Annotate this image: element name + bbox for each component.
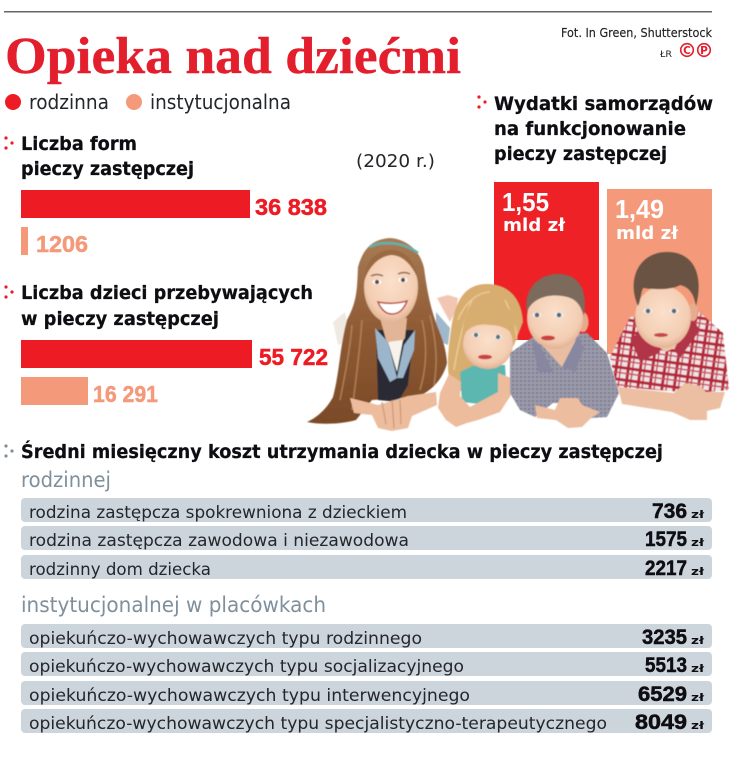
bar: rodzinna 55 722 [21,340,252,368]
photo: four children lying down [307,238,729,431]
heading: pieczy zastępczej [494,143,667,165]
value: 1,49 mld zł [615,194,679,244]
bar: instytucjonalna 1206 [21,227,28,255]
icon: copyright mark: C [683,45,691,57]
row: spokrewniona: 736 [652,500,687,523]
child: girl with long hair [307,238,458,431]
row: typu socjalizacyjnego: opiekuńczo-wychowawczych typu socjalizacyjnego [29,657,464,677]
row: typu socjalizacyjnego [21,652,712,677]
heading: na funkcjonowanie [494,118,686,140]
value: 1,49 mld zł: 1,49 [615,194,664,224]
child: blonde toddler [438,284,523,427]
row: rodzinny dom dziecka [21,555,712,580]
icon: grey dots [4,444,14,458]
panel: średni miesięczny koszt [4,439,712,734]
row: typu socjalizacyjnego: zł [691,662,705,675]
bar: rodzinna 36 838 [21,190,250,218]
heading: w pieczy zastępczej [21,308,219,330]
row: zawodowa: rodzina zastępcza zawodowa i niezawodowa [29,531,409,551]
heading: pieczy zastępczej [21,158,194,180]
heading: Średni miesięczny koszt utrzymania dziecka w pieczy zastępczej [21,439,663,463]
row: rodzinny dom dziecka: zł [691,565,705,578]
legend dot: instytucjonalna [126,94,142,110]
row: typu specjalistyczno-terapeutycznego: 8049 [635,711,687,734]
heading: Liczba form [21,133,137,155]
panel: wydatki samorządów [477,93,713,354]
row: spokrewniona [21,498,712,523]
row: typu specjalistyczno-terapeutycznego: zł [691,719,705,732]
value: 1206: 1206 [36,231,88,257]
author initials: ŁR [659,50,672,60]
row: zawodowa: zł [691,536,705,549]
value: 55 722: 55 722 [259,344,328,370]
heading: Liczba dzieci przebywających [21,282,313,304]
row: typu specjalistyczno-terapeutycznego: opiekuńczo-wychowawczych typu specjalistyczno-terapeutycznego [29,714,607,734]
row: typu specjalistyczno-terapeutycznego [21,709,712,734]
title: Opieka nad dziećmi [5,28,461,85]
legend [5,90,291,114]
year note: (2020 r.) [356,151,435,172]
photo credit: Fot. In Green, Shutterstock [561,25,713,40]
row: zawodowa: 1575 [645,528,687,551]
row: rodzinny dom dziecka: rodzinny dom dziecka [29,560,211,580]
value: 1,55 mld zł: 1,55 [502,187,549,217]
icon: press mark: P [700,45,708,57]
row: typu rodzinnego: zł [691,634,705,647]
heading: Wydatki samorządów [494,93,713,115]
row: typu interwencyjnego: opiekuńczo-wychowawczych typu interwencyjnego [29,686,470,706]
row: typu rodzinnego: 3235 [642,626,687,649]
panel: liczba dzieci [4,282,328,407]
icon: copyright mark [681,44,693,57]
icon: red dots [477,95,487,109]
bar: rodzinna 1,55 [494,182,599,340]
row: typu interwencyjnego: 6529 [638,683,687,706]
icon: red dots [4,285,14,299]
subheading: rodzinnej: rodzinnej [21,468,111,492]
row: typu rodzinnego: opiekuńczo-wychowawczych typu rodzinnego [29,629,422,649]
row: rodzinny dom dziecka: 2217 [645,557,687,580]
value: 36 838: 36 838 [255,194,327,220]
bar: instytucjonalna 16 291 [21,377,88,405]
row: zawodowa [21,526,712,551]
row: spokrewniona: zł [691,508,705,521]
panel: liczba form pieczy [4,133,327,257]
value: 1,49 mld zł: mld zł [616,223,679,244]
icon: red dots [4,136,14,150]
row: typu interwencyjnego [21,681,712,706]
top rule [4,11,712,12]
credits [561,25,713,60]
value: 1,55 mld zł [502,187,566,236]
subheading: instytucjonalnej: instytucjonalnej w placówkach [21,593,326,617]
legend label: rodzinna: rodzinna [29,90,109,114]
row: typu rodzinnego [21,624,712,649]
icon: press mark [698,44,710,57]
legend dot: rodzinna [5,94,21,110]
legend label: instytucjonalna: instytucjonalna [150,90,291,114]
row: typu socjalizacyjnego: 5513 [645,654,687,677]
child: boy in grey shirt [510,274,619,428]
row: spokrewniona: rodzina zastępcza spokrewniona z dzieckiem [29,503,407,523]
row: typu interwencyjnego: zł [691,691,705,704]
value: 1,55 mld zł: mld zł [503,215,566,236]
bar: instytucjonalna 1,49 [607,189,712,354]
child: boy in red plaid shirt [610,252,729,420]
value: 16 291: 16 291 [93,381,158,407]
